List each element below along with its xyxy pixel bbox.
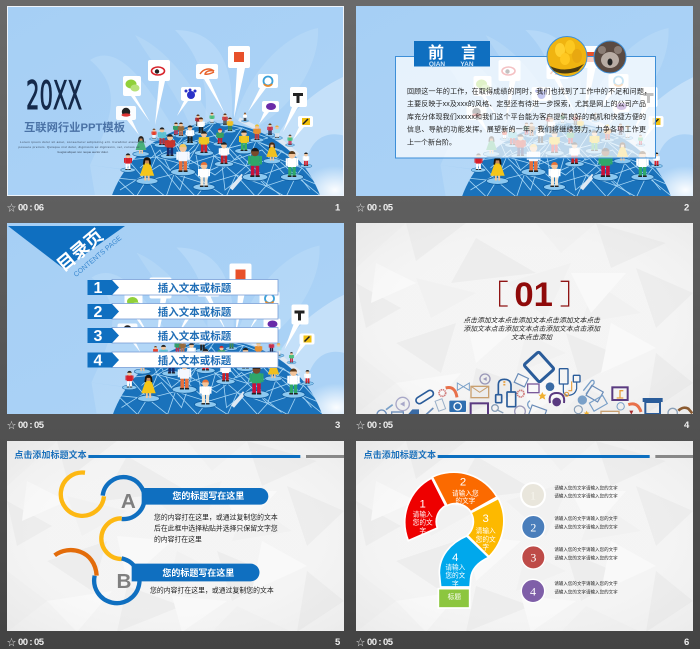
item A: 后在此框中选择粘贴并选择只保留文字您 xyxy=(154,523,278,532)
icon: tablet xyxy=(524,352,554,382)
slide 2 footer xyxy=(356,202,689,214)
slide 5: A/B list xyxy=(7,441,344,631)
segment 2: 请输入您 xyxy=(452,488,479,497)
section number 01: 01 xyxy=(514,276,553,314)
slide 1 footer xyxy=(7,202,341,214)
segment 1: 字 xyxy=(419,526,426,535)
segment 3: 请输入 xyxy=(476,526,496,535)
segment 4: 请输入 xyxy=(445,562,466,571)
list item 2: 请输入您的文字请输入您的文字 xyxy=(554,515,618,522)
segment 3 xyxy=(467,498,504,557)
preface paragraph: 回顾这一年的工作，在取得成绩的同时，我们也找到了工作中的不足和问题， xyxy=(407,86,651,96)
slide 6 footer: ☆ xyxy=(356,638,365,648)
contents row 4 xyxy=(88,352,278,370)
segment 3: 3 xyxy=(483,513,489,525)
slide 3: contents xyxy=(7,223,344,414)
slide 5 footer: 00 : 05 xyxy=(18,637,45,648)
cover year title: 20XX xyxy=(26,74,82,119)
list item 1 xyxy=(521,483,618,507)
segment 3: 您的文 xyxy=(476,534,496,543)
segment 3: 字 xyxy=(482,543,489,552)
segment 1 xyxy=(405,478,446,541)
item B: 您的内容打在这里，或通过复制您的文本 xyxy=(150,585,274,594)
slide 4: section divider xyxy=(356,223,693,414)
section number 01 xyxy=(500,276,569,314)
section description: 点击添加文本点击添加文本点击添加文本点击 xyxy=(463,317,601,325)
segment 1: 您的文 xyxy=(413,518,433,527)
contents row 2 xyxy=(88,304,278,321)
list item 2 xyxy=(522,515,618,539)
slide 2 footer: 2 xyxy=(684,202,689,214)
segment 4: 字 xyxy=(452,579,459,588)
item B: B xyxy=(117,570,131,593)
list item 3 xyxy=(522,546,618,569)
slide 6 footer xyxy=(356,637,689,648)
contents row 4: 插入文本或标题 xyxy=(158,354,232,367)
segment 4: 4 xyxy=(452,552,458,564)
cover lorem text: feugiat aliquet non neque auctor dolor. xyxy=(57,150,109,154)
preface paragraph: 库充分体现我们xxxxx和我们这个平台能为客户提供良好的商机和快捷方便的 xyxy=(407,112,646,121)
list item 3: 请输入您的文字请输入您的文字 xyxy=(554,554,618,561)
slide 2 footer: ☆ xyxy=(356,203,365,213)
contents corner banner: CONTENTS PAGE xyxy=(73,235,124,279)
contents row 3 xyxy=(88,328,278,345)
preface paragraph: 信息、导航的功能发挥。展望新的一年，我们将继续努力，力争各项工作更 xyxy=(407,124,646,134)
segment 1: 1 xyxy=(420,499,426,511)
contents row 1 xyxy=(88,280,278,297)
connector arcs xyxy=(55,473,145,603)
contents row 2: 2 xyxy=(94,304,103,321)
list item 1: 1 xyxy=(530,488,536,502)
item B: 您的标题写在这里 xyxy=(162,567,234,578)
slide 1 footer: ☆ xyxy=(7,203,16,213)
contents row 1: 1 xyxy=(94,280,103,297)
segment 1: 请输入 xyxy=(413,509,433,518)
section description: 文本点击添加 xyxy=(511,333,553,341)
segment 4 xyxy=(439,536,489,588)
item A xyxy=(121,488,278,543)
item A: 您的标题写在这里 xyxy=(172,490,244,501)
slide 3 footer: 3 xyxy=(335,420,340,431)
slide 4 footer: 00 : 05 xyxy=(367,420,394,431)
slide 4 footer xyxy=(356,420,690,431)
preface text panel xyxy=(396,56,656,158)
item A: A xyxy=(121,490,136,513)
photo: koala xyxy=(594,41,626,73)
list item 4 xyxy=(521,579,618,603)
preface paragraph xyxy=(407,86,651,146)
slide 6 header: 点击添加标题文本 xyxy=(364,449,436,460)
slide 6 footer: 00 : 05 xyxy=(367,637,394,648)
contents row 3: 插入文本或标题 xyxy=(158,330,232,342)
section description xyxy=(463,317,601,341)
list item 2: 2 xyxy=(530,520,536,534)
list item 1: 请输入您的文字请输入您的文字 xyxy=(554,493,618,500)
slide 6: question mark xyxy=(356,441,693,631)
list item 4: 4 xyxy=(530,584,536,598)
list item 3: 3 xyxy=(530,551,536,565)
slide 5 footer: ☆ xyxy=(7,638,16,648)
slide 1 footer: 1 xyxy=(335,202,341,214)
contents row 2: 插入文本或标题 xyxy=(158,306,232,318)
slide 2 footer: 00 : 05 xyxy=(367,202,394,214)
slide 4 footer: 4 xyxy=(684,420,690,431)
item B xyxy=(117,564,274,594)
contents corner banner xyxy=(8,225,125,279)
preface paragraph: 上一个新台阶。 xyxy=(407,138,456,146)
contents row 3: 3 xyxy=(94,328,103,345)
list item 3: 请输入您的文字请输入您的文字 xyxy=(554,546,618,553)
preface title box xyxy=(414,41,490,68)
slide 1 footer: 00 : 06 xyxy=(18,202,44,214)
preface title box: 前 xyxy=(428,43,444,62)
cover subtitle: 互联网行业PPT模板 xyxy=(24,120,125,134)
icon pile xyxy=(377,352,692,420)
segment 2: 2 xyxy=(460,476,466,488)
item A: 您的内容打在这里，或通过复制您的文本 xyxy=(154,512,278,521)
section description: 添加文本点击添加文本点击添加文本点击添加 xyxy=(463,325,601,333)
contents row 1: 插入文本或标题 xyxy=(158,282,232,294)
preface title box: 言 xyxy=(461,43,477,62)
slide 3 footer: ☆ xyxy=(7,420,16,430)
green label: 标题 xyxy=(448,592,461,601)
list item 1: 请输入您的文字请输入您的文字 xyxy=(554,484,618,491)
slide 3 footer xyxy=(7,420,340,431)
preface paragraph: 主要反映于xx及xxx的风格、定型还有待进一步探索，尤其是网上的公司产品 xyxy=(407,99,646,108)
slide 6 footer: 6 xyxy=(684,637,689,648)
segment 2: 的文字 xyxy=(455,496,476,505)
cover lorem text: posuere pretium. Quisque nisl dolor, dignissim ac dignissim, vel, cursus ac xyxy=(18,145,140,149)
slide 1: cover xyxy=(7,6,344,196)
numbered list xyxy=(521,483,618,603)
preface title box: YAN xyxy=(460,61,474,68)
list item 2: 请输入您的文字请输入您的文字 xyxy=(554,523,618,530)
slide 3 footer: 00 : 05 xyxy=(18,420,45,431)
slide 2: preface xyxy=(356,6,693,196)
preface title box: QIAN xyxy=(429,61,445,68)
photo: yellow flowers xyxy=(547,36,587,76)
contents row 4: 4 xyxy=(94,352,103,370)
question mark diagram xyxy=(405,472,504,608)
cover lorem text xyxy=(18,140,147,154)
list item 4: 请输入您的文字请输入您的文字 xyxy=(554,580,618,587)
contents corner banner: 目录页 xyxy=(53,225,107,275)
item A: 的内容打在这里 xyxy=(154,534,202,543)
slide 4 footer: ☆ xyxy=(356,420,365,430)
slide 5 header: 点击添加标题文本 xyxy=(14,449,87,460)
segment 2 xyxy=(432,472,497,512)
slide 5 footer: 5 xyxy=(335,637,341,648)
segment 4: 您的文 xyxy=(445,571,466,580)
cover lorem text: Lorem ipsum dolor sit amet, consectetur adipiscing elit. Curabitur elementum xyxy=(20,140,147,144)
list item 4: 请输入您的文字请输入您的文字 xyxy=(554,588,618,595)
slide 5 footer xyxy=(7,637,341,648)
